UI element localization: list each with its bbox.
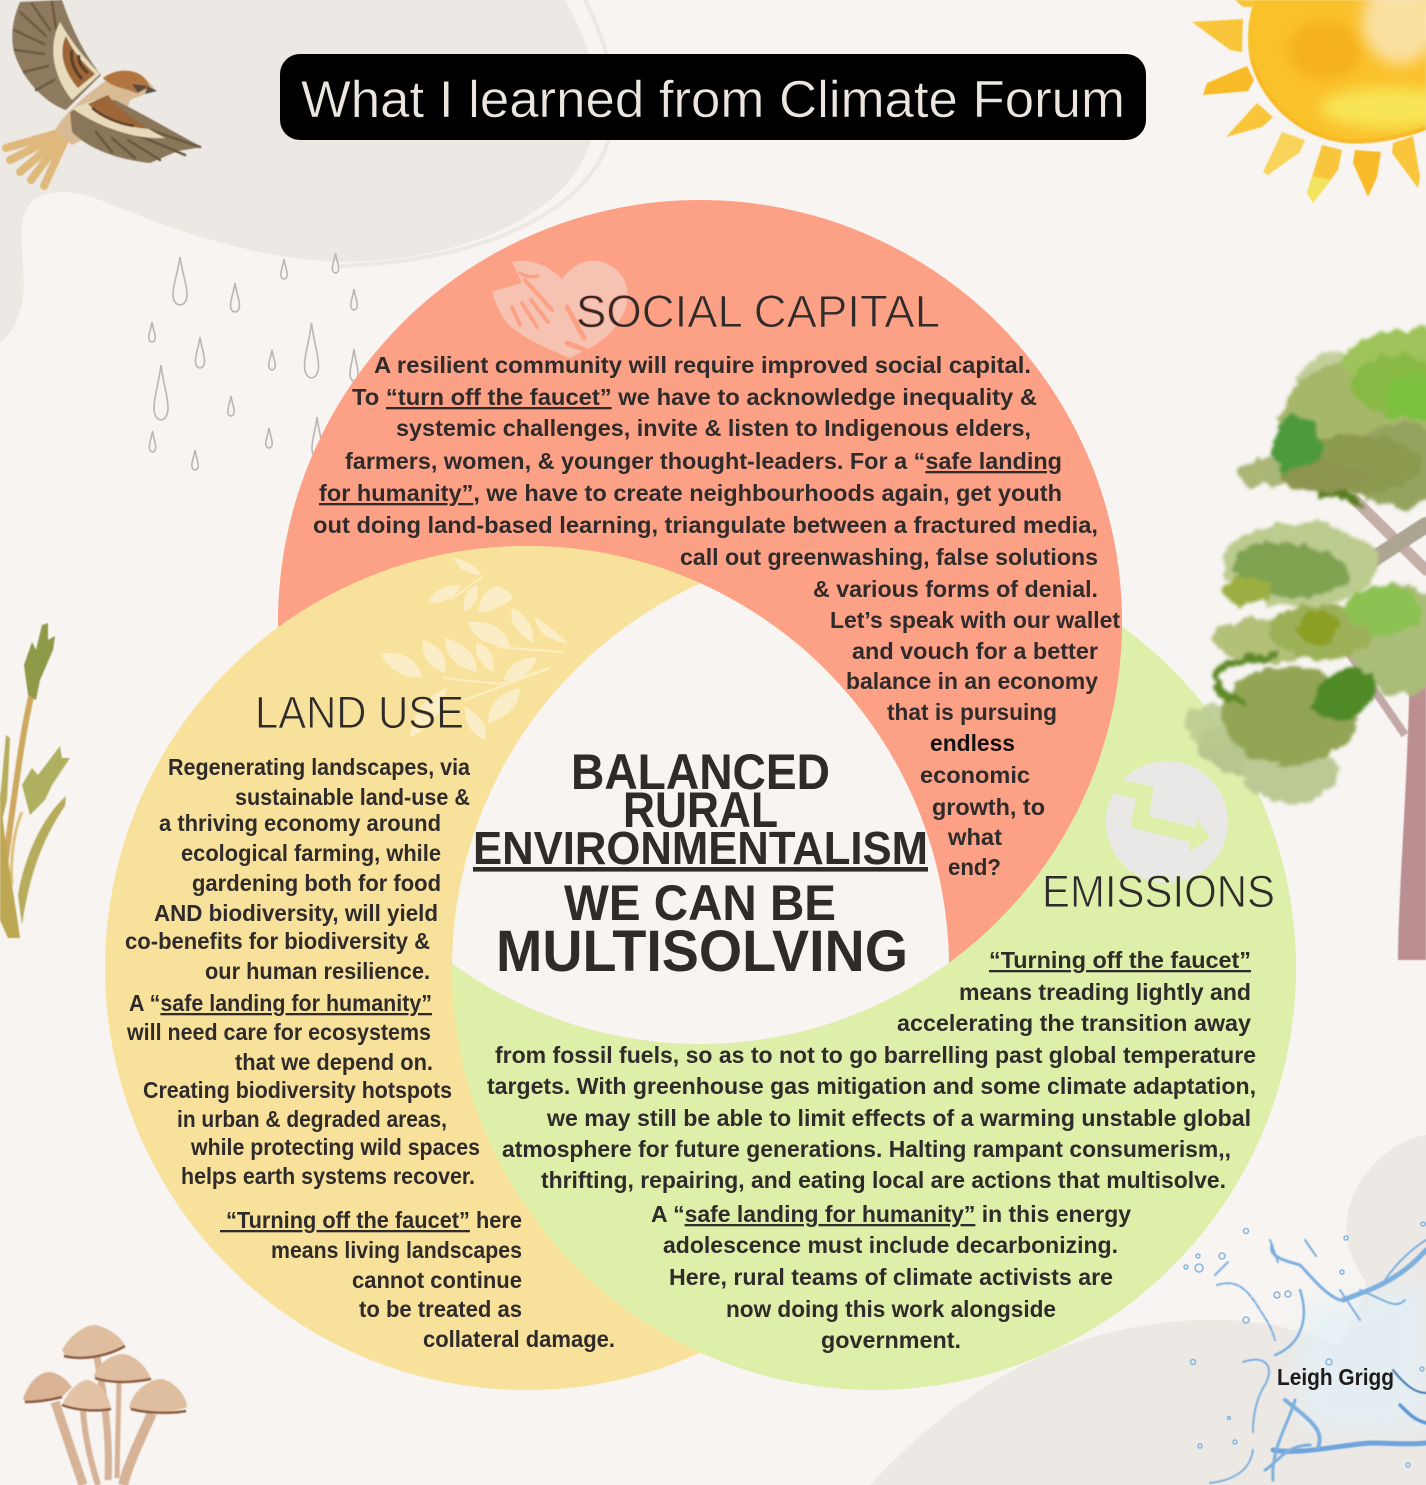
text block: emissions: adolescence must include decarbonizing.	[663, 1232, 1118, 1258]
text block: social capital: for humanity”, we have to create neighbourhoods again, get youth	[319, 480, 1062, 506]
icon: bird	[6, 0, 202, 186]
icon: heart with hands	[492, 261, 628, 358]
text block: land use	[125, 754, 615, 1352]
text block: emissions: now doing this work alongside	[726, 1296, 1056, 1322]
text block: land use: A “safe landing for humanity”	[129, 990, 432, 1016]
venn diagram circles	[105, 200, 1296, 1390]
text block: social capital: & various forms of denial.	[813, 576, 1098, 602]
text block: emissions: we may still be able to limit effects of a warming unstable global	[546, 1105, 1251, 1131]
center heading: we can be multisolving	[496, 875, 908, 984]
center heading: balanced rural environmentalism: RURAL	[623, 782, 778, 838]
text block: land use: “Turning off the faucet” here	[220, 1207, 522, 1233]
text block: emissions: atmosphere for future generations. Halting rampant consumerism,,	[502, 1136, 1231, 1162]
text block: land use: while protecting wild spaces	[190, 1134, 480, 1160]
heading: land use: LAND USE	[255, 687, 464, 738]
icon: mushrooms	[23, 1325, 187, 1485]
icon: water splash	[1184, 1222, 1426, 1483]
text block: land use: our human resilience.	[205, 958, 430, 984]
text block: social capital	[313, 352, 1120, 880]
tree trunk and branches	[1340, 500, 1426, 960]
text block: land use: Creating biodiversity hotspots	[143, 1077, 452, 1103]
icon: tree	[1185, 320, 1426, 960]
bird upper wing	[12, 0, 101, 110]
text block: social capital: A resilient community will require improved social capital.	[374, 352, 1031, 378]
icon: leaves	[380, 558, 568, 740]
text block: land use: will need care for ecosystems	[126, 1019, 431, 1045]
splash pale body	[1295, 1280, 1426, 1435]
text block: land use: collateral damage.	[423, 1326, 615, 1352]
bird lower wing	[70, 100, 202, 163]
text block: emissions: A “safe landing for humanity” in this energy	[651, 1201, 1131, 1227]
text block: social capital: end?	[948, 854, 1001, 880]
author credit: Leigh Grigg	[1277, 1364, 1394, 1390]
text block: social capital: and vouch for a better	[852, 638, 1098, 664]
text block: land use: co-benefits for biodiversity &	[125, 928, 430, 954]
text block: emissions: Here, rural teams of climate activists are	[669, 1264, 1113, 1290]
text block: social capital: out doing land-based learning, triangulate between a fractured media,	[313, 512, 1098, 538]
text block: emissions: “Turning off the faucet”	[989, 947, 1251, 973]
icon: sun	[1192, 0, 1426, 203]
center heading: we can be multisolving: MULTISOLVING	[496, 919, 908, 984]
text block: social capital: To “turn off the faucet” we have to acknowledge inequality &	[352, 384, 1037, 410]
tree foliage	[1185, 320, 1426, 803]
text block: land use: AND biodiversity, will yield	[154, 900, 438, 926]
center heading: balanced rural environmentalism: ENVIRONMENTALISM	[473, 822, 928, 874]
heading: social capital: SOCIAL CAPITAL	[576, 286, 940, 337]
text block: land use: to be treated as	[359, 1296, 522, 1322]
text block: land use: Regenerating landscapes, via	[168, 754, 470, 780]
center heading: balanced rural environmentalism: BALANCED	[571, 744, 830, 800]
icon: grass	[0, 623, 70, 938]
text block: social capital: what	[947, 824, 1002, 850]
bird body	[55, 72, 155, 145]
text block: social capital: that is pursuing	[887, 699, 1057, 725]
splash lines	[1210, 1240, 1426, 1483]
center heading: we can be multisolving: WE CAN BE	[564, 875, 836, 931]
text block: emissions	[487, 947, 1256, 1353]
bird tail	[6, 132, 66, 186]
text block: emissions: from fossil fuels, so as to not to go barrelling past global temperature	[495, 1042, 1256, 1068]
text block: social capital: endless	[930, 730, 1015, 756]
text block: social capital: systemic challenges, invite & listen to Indigenous elders,	[396, 415, 1031, 441]
text block: land use: gardening both for food	[192, 870, 441, 896]
text block: land use: sustainable land-use &	[235, 784, 470, 810]
icon: emissions arrow	[1105, 761, 1228, 883]
background blob: top left	[0, 0, 596, 342]
text block: social capital: balance in an economy	[846, 668, 1098, 694]
text block: land use: means living landscapes	[271, 1237, 522, 1263]
text block: emissions: government.	[821, 1327, 961, 1353]
title banner	[280, 54, 1146, 140]
text block: emissions: accelerating the transition away	[897, 1010, 1251, 1036]
text block: land use: helps earth systems recover.	[181, 1163, 475, 1189]
text block: land use: cannot continue	[352, 1267, 522, 1293]
icon: rain drops	[149, 253, 358, 470]
text block: emissions: thrifting, repairing, and eating local are actions that multisolve.	[541, 1167, 1226, 1193]
center heading: balanced rural environmentalism	[473, 744, 928, 874]
text block: land use: that we depend on.	[235, 1049, 433, 1075]
text block: social capital: economic	[920, 762, 1030, 788]
text block: social capital: growth, to	[932, 794, 1045, 820]
background blob: bottom right	[870, 1135, 1426, 1485]
text block: emissions: targets. With greenhouse gas mitigation and some climate adaptation,	[487, 1073, 1256, 1099]
title banner: What I learned from Climate Forum	[301, 71, 1125, 129]
text block: land use: a thriving economy around	[159, 810, 441, 836]
text block: social capital: farmers, women, & younger thought-leaders. For a “ safe landing	[345, 448, 1062, 474]
text block: land use: in urban & degraded areas,	[177, 1106, 447, 1132]
heading: emissions: EMISSIONS	[1042, 866, 1275, 917]
text block: social capital: Let’s speak with our wallet	[830, 607, 1120, 633]
text block: social capital: call out greenwashing, false solutions	[680, 544, 1098, 570]
text block: emissions: means treading lightly and	[959, 979, 1251, 1005]
splash droplets	[1184, 1222, 1425, 1467]
text block: land use: ecological farming, while	[181, 840, 441, 866]
